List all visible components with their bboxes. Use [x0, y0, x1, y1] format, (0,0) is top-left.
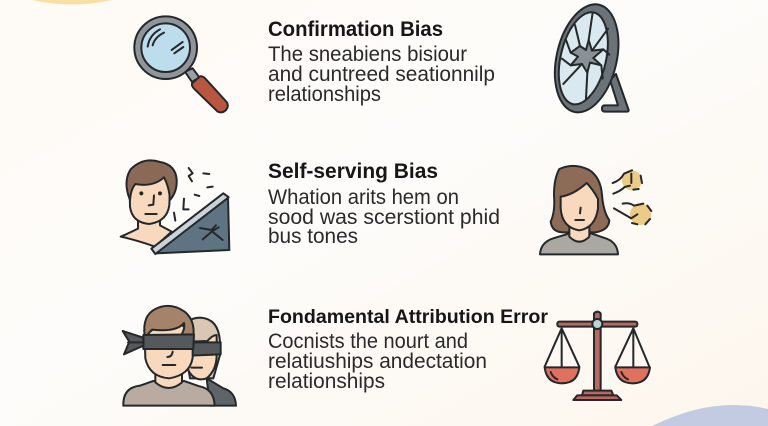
text block: self-serving bias description: bus tones — [268, 225, 358, 248]
heading: fundamental attribution error: Fondamental Attribution Error — [268, 306, 548, 328]
icon: two blindfolded people — [123, 306, 236, 406]
text block: fundamental attribution error description: Cocnists the nourt and — [268, 330, 468, 353]
icon: magnifying glass — [134, 16, 228, 112]
panel: self-serving bias — [121, 160, 651, 254]
panel: confirmation bias — [134, 0, 629, 119]
text block: fundamental attribution error description: relatiuships andectation — [268, 350, 487, 373]
text block: self-serving bias description: Whation arits hem on — [268, 186, 459, 209]
text block: confirmation bias description: The sneabiens bisiour — [268, 43, 467, 66]
panel: fundamental attribution error — [123, 306, 650, 406]
text block: confirmation bias description: relationships — [268, 83, 381, 106]
text block: self-serving bias description: sood was scerstiont phid — [268, 206, 500, 229]
icon: man with broken mirror — [121, 160, 229, 254]
icon: balance scales — [545, 312, 650, 400]
text block: fundamental attribution error description: relationships — [268, 370, 385, 393]
text block: fundamental attribution error description — [268, 330, 487, 393]
decorative blue blob, bottom right — [652, 405, 768, 426]
heading: confirmation bias: Confirmation Bias — [268, 18, 443, 41]
icon: cracked mirror — [545, 0, 629, 119]
icon: woman with deflected thoughts — [540, 166, 651, 254]
heading: self-serving bias: Self-serving Bias — [268, 160, 438, 183]
decorative yellow blob, top left — [32, 0, 112, 4]
text block: confirmation bias description — [268, 43, 495, 106]
text block: self-serving bias description — [268, 186, 500, 248]
text block: confirmation bias description: and cuntreed seationnilp — [268, 63, 495, 86]
